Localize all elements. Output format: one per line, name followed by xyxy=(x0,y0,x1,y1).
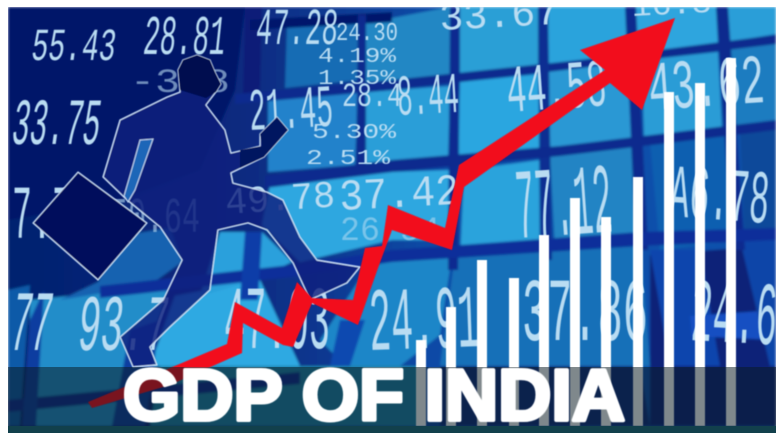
board numbers: 24.30 xyxy=(336,18,398,48)
board numbers: 21.45 xyxy=(247,77,335,149)
board numbers: 28.4 xyxy=(342,79,402,117)
icon: briefcase xyxy=(33,172,147,280)
board numbers: 26 54 xyxy=(340,213,440,251)
board numbers: 77 xyxy=(4,278,58,376)
board numbers: 55.43 xyxy=(28,22,119,74)
bottom title band xyxy=(8,367,776,433)
arm gap xyxy=(124,139,153,202)
board numbers: 5.30% xyxy=(312,122,397,145)
white bar chart xyxy=(416,58,736,426)
board numbers: 2.51% xyxy=(306,148,391,171)
board numbers: 24.91 xyxy=(367,272,481,378)
board numbers: 50.64 xyxy=(110,191,200,248)
board numbers: 28.81 xyxy=(140,7,229,71)
icon: running businessman silhouette xyxy=(103,55,360,367)
board numbers: 93.7 xyxy=(73,284,173,375)
board numbers xyxy=(12,7,776,352)
board numbers: 1.35% xyxy=(318,68,396,91)
board numbers: 47.28 xyxy=(254,1,340,60)
board numbers: 37.86 xyxy=(522,266,648,368)
board numbers: 37.42 xyxy=(338,168,461,224)
board numbers: 49.78 xyxy=(224,175,337,226)
title: GDP OF INDIA xyxy=(123,356,625,436)
board numbers: -3.8 xyxy=(130,65,230,103)
board numbers: 44.58 xyxy=(504,49,609,133)
red rising arrow xyxy=(88,18,675,408)
board numbers: 8.44 xyxy=(396,65,461,133)
board numbers: 4.19% xyxy=(318,46,396,69)
grid bars xyxy=(243,7,262,96)
board numbers: 33.75 xyxy=(7,89,106,164)
board numbers: 47.03 xyxy=(224,274,330,376)
board numbers: 7.7 xyxy=(12,175,72,261)
